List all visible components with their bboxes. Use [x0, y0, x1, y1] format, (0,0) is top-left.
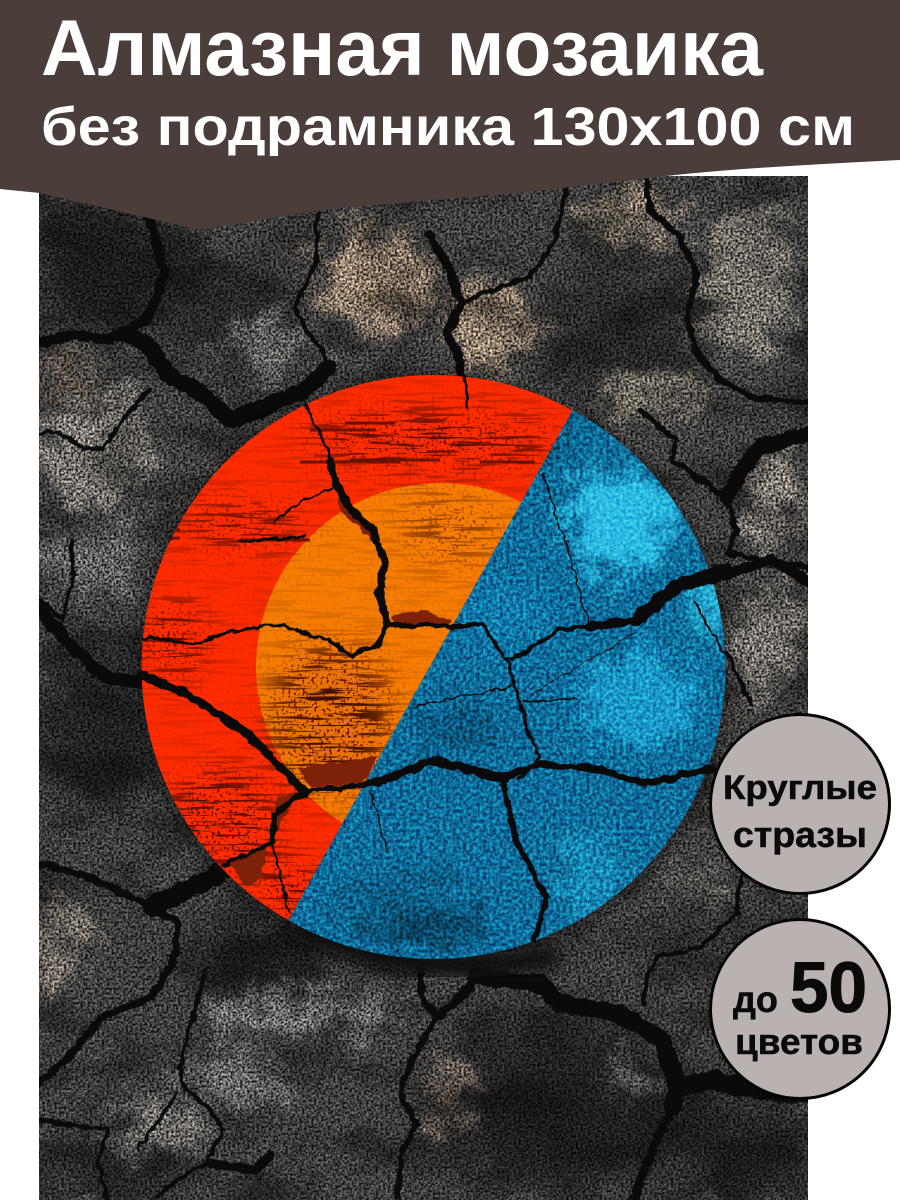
badge: round rhinestones: стразы — [733, 814, 867, 855]
subtitle: без подрамника 130х100 см — [41, 97, 855, 157]
badge: up to 50 colours: 50 — [790, 949, 867, 1028]
title: Алмазная мозаика — [41, 3, 764, 92]
red half with orange inner circle — [142, 375, 572, 920]
stone background — [20, 176, 820, 1200]
badge: up to 50 colours: цветов — [735, 1021, 863, 1062]
badge: up to 50 colours — [710, 920, 890, 1098]
shadow around circle — [139, 378, 727, 966]
background cracks — [39, 177, 809, 1200]
badge: round rhinestones — [710, 714, 890, 894]
blue half — [288, 410, 726, 959]
cracks: lower stone — [39, 863, 809, 1200]
header banner — [0, 0, 900, 230]
circle: red half, orange sun, blue half — [142, 375, 726, 959]
artwork: cracked stone with split circle — [20, 176, 820, 1200]
badge: round rhinestones: Круглые — [723, 769, 877, 807]
cracks: middle stone — [40, 576, 74, 620]
flaps of broken paint — [231, 490, 453, 887]
cracks: upper stone — [39, 177, 808, 577]
cracks through circle — [142, 376, 725, 940]
badge: up to 50 colours: до — [733, 979, 778, 1020]
